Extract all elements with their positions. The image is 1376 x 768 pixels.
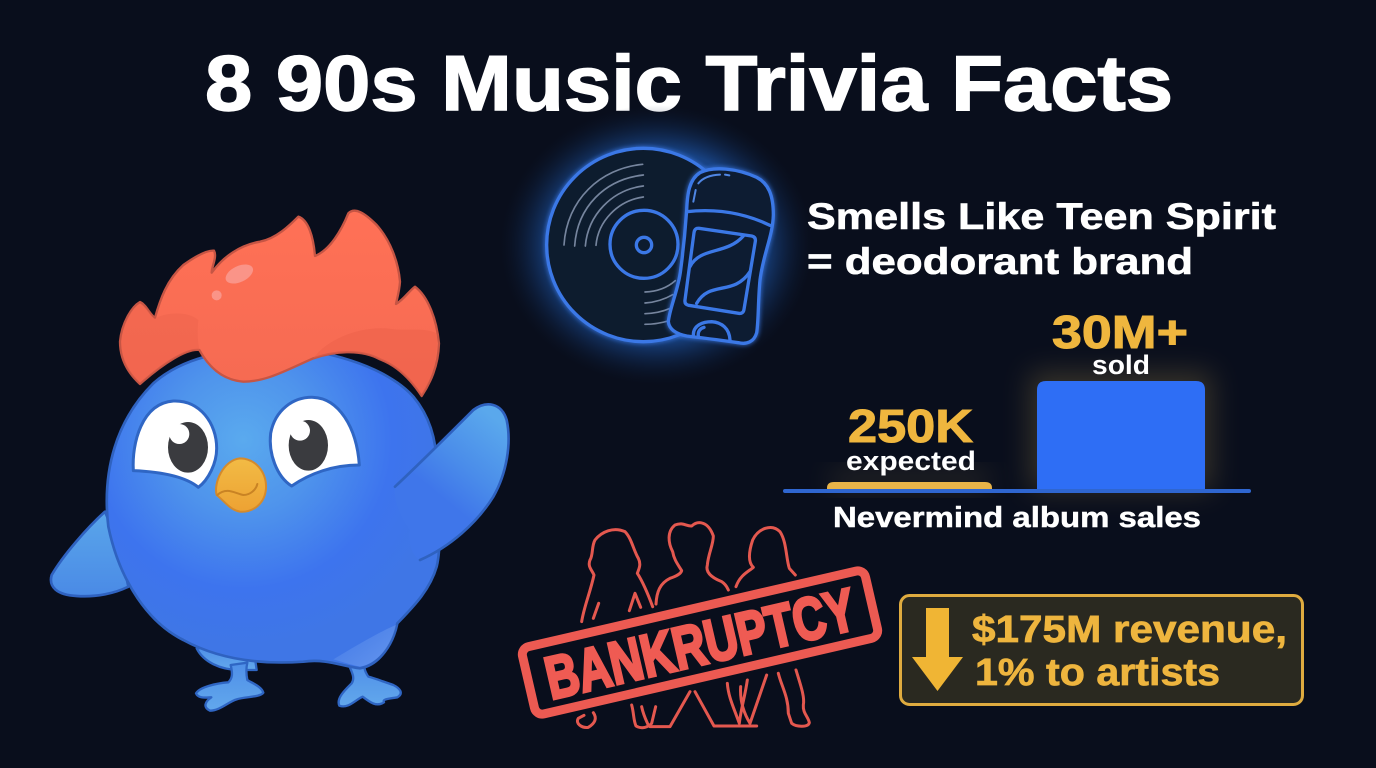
icon: vinyl record and deodorant stick xyxy=(500,105,813,385)
text: Smells Like Teen Spirit: Smells Like Teen Spirit xyxy=(807,196,1276,237)
icon: down arrow xyxy=(912,608,963,691)
mascot: blue bird xyxy=(51,211,509,711)
callout: revenue xyxy=(900,596,1302,704)
callout: revenue: 1% to artists xyxy=(975,652,1220,694)
text: Smells Like Teen Spirit: = deodorant brand xyxy=(807,241,1193,282)
text: Smells Like Teen Spirit xyxy=(807,196,1276,282)
hair shading xyxy=(313,328,437,395)
bar: 250K expected xyxy=(827,482,992,490)
chart caption: Nevermind album sales xyxy=(833,502,1201,534)
stamp: bankruptcy: BANKRUPTCY xyxy=(539,576,862,712)
right wing xyxy=(395,404,509,560)
stamp: bankruptcy xyxy=(521,569,879,716)
legs and feet xyxy=(196,647,401,711)
label: 30M+: 30M+ xyxy=(1052,306,1188,358)
label: expected: expected xyxy=(846,446,976,476)
icon: band silhouettes xyxy=(577,523,809,728)
body xyxy=(107,348,440,668)
beak xyxy=(216,458,266,512)
body sheen xyxy=(333,625,396,667)
title: 8 90s Music Trivia Facts xyxy=(205,39,1173,127)
label: sold: sold xyxy=(1092,350,1150,380)
right eye xyxy=(270,397,359,486)
hair highlights xyxy=(223,261,256,287)
axis xyxy=(783,489,1251,493)
hair xyxy=(120,211,439,396)
left wing xyxy=(51,512,128,596)
bar: 30M+ sold xyxy=(1037,381,1205,491)
label: 250K: 250K xyxy=(848,400,973,452)
left eye xyxy=(133,401,217,487)
callout text: $175M revenue, xyxy=(972,609,1287,651)
chart: Nevermind album sales xyxy=(783,306,1251,534)
